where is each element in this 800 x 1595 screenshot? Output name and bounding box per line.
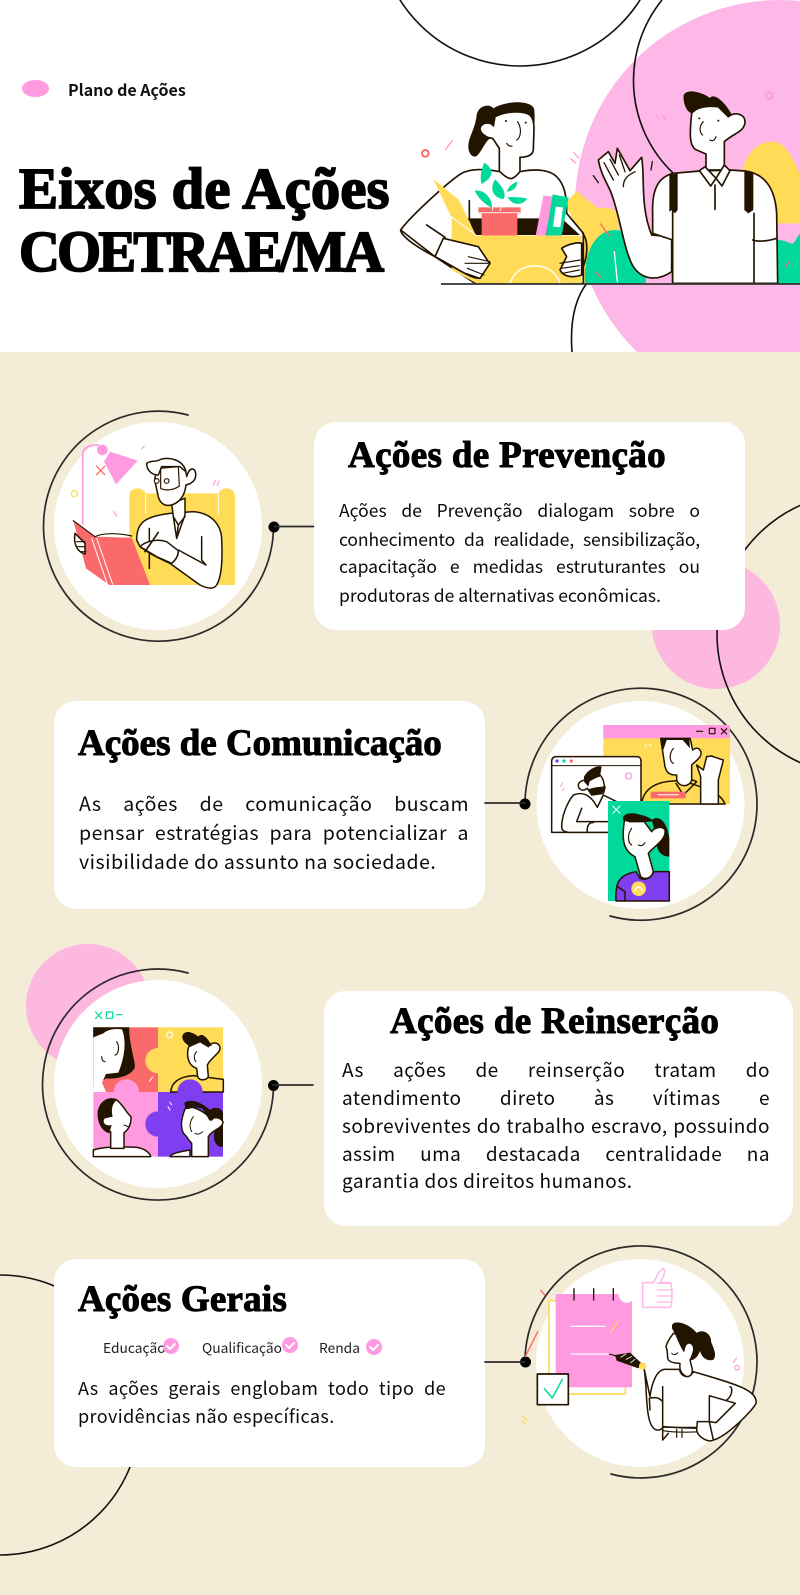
body text: reinsertion [342,1056,770,1194]
books [536,196,553,236]
body text: communication: pensar estratégias para potencializar a [79,817,469,846]
heading: reinsertion: Ações de Reinserção [390,1001,719,1042]
body text: communication: As ações de comunicação buscam [79,788,469,817]
checklist row [103,1337,382,1357]
title line 2: COETRAE/MA [19,219,382,284]
body text: reinsertion: assim uma destacada centralidade na [342,1140,770,1167]
thumbs up [643,1269,672,1307]
marker [615,1353,642,1368]
browser window [552,757,641,832]
body text: communication: visibilidade do assunto na sociedade. [79,846,436,875]
body text: general actions: As ações gerais englobam todo tipo de [78,1375,446,1401]
head [666,1333,695,1377]
book [73,521,150,585]
face details [507,122,520,146]
bushes [585,230,800,283]
window icons [96,1012,122,1019]
heading: communication: Ações de Comunicação [78,723,442,764]
illustration: video call windows [552,725,730,901]
pencil hand [140,540,178,563]
hand finger lines [604,155,625,180]
hands [435,238,490,278]
bottom-right woman [208,1108,223,1147]
item: Qualificação: Qualificação [202,1337,282,1357]
bottom-left man [93,1147,151,1157]
body text: reinsertion: As ações de reinserção tratam do [342,1056,770,1083]
body [137,512,222,588]
top-left woman [93,1027,135,1087]
man [598,92,778,283]
head [155,465,196,505]
woman [401,102,587,283]
background yellow hills [565,142,800,283]
item: Renda: Renda [319,1337,360,1357]
checkbox [537,1374,568,1405]
illustration: man reading [71,445,235,588]
header background band [0,0,800,352]
badge: reinsertion circle with puzzle [43,969,313,1200]
leaves [475,163,527,208]
illustration: puzzle of four people [93,1012,223,1157]
body text: reinsertion: garantia dos direitos humanos. [342,1167,633,1194]
ground line [441,283,800,285]
ring and connector [43,969,313,1200]
panel: general actions card [54,1259,485,1467]
box [452,217,582,283]
body text: general actions: providências não específicas. [78,1403,335,1429]
ring and connector [485,688,757,920]
body text: reinsertion: atendimento direto às vítimas e [342,1084,770,1111]
body text: prevention: capacitação e medidas estruturantes ou [339,554,700,579]
kicker: Plano de Ações: Plano de Ações [68,77,186,101]
panel: communication card [54,701,485,909]
illustration: woman ticking a checklist [522,1269,756,1441]
badge: general actions circle with notepad [485,1246,757,1478]
check icons [163,1337,382,1355]
body text: reinsertion: sobreviventes do trabalho escravo, possuindo [342,1112,770,1139]
small accents [422,92,789,282]
body text: prevention: produtoras de alternativas econômicas. [339,583,661,608]
person in browser [562,794,617,832]
body text: prevention: Ações de Prevenção dialogam sobre o [339,498,700,523]
panel: prevention card [314,422,745,630]
title line 1: Eixos de Ações [19,156,390,221]
panel: reinsertion card [324,991,793,1226]
caller in yellow window [642,781,725,804]
box interior [468,218,580,235]
ring and connector [44,411,314,641]
item: Educação: Educação [103,1337,166,1357]
illustration: woman with box and man waving [401,92,800,283]
armchair [129,488,235,585]
heading: general actions: Ações Gerais [78,1279,287,1320]
green window [608,801,669,901]
badge: prevention circle with reader [44,411,314,641]
top-right man [171,1076,223,1092]
body text: communication [79,788,469,875]
body text: prevention: conhecimento da realidade, sensibilização, [339,527,700,552]
plant pot [478,207,521,236]
woman body [643,1365,756,1440]
badge: communication circle with video calls [485,688,757,920]
heading: prevention: Ações de Prevenção [348,435,666,476]
body text: general actions [78,1375,446,1429]
ring and connector [485,1246,757,1478]
body text: prevention [339,498,700,608]
logo pill [22,80,49,97]
